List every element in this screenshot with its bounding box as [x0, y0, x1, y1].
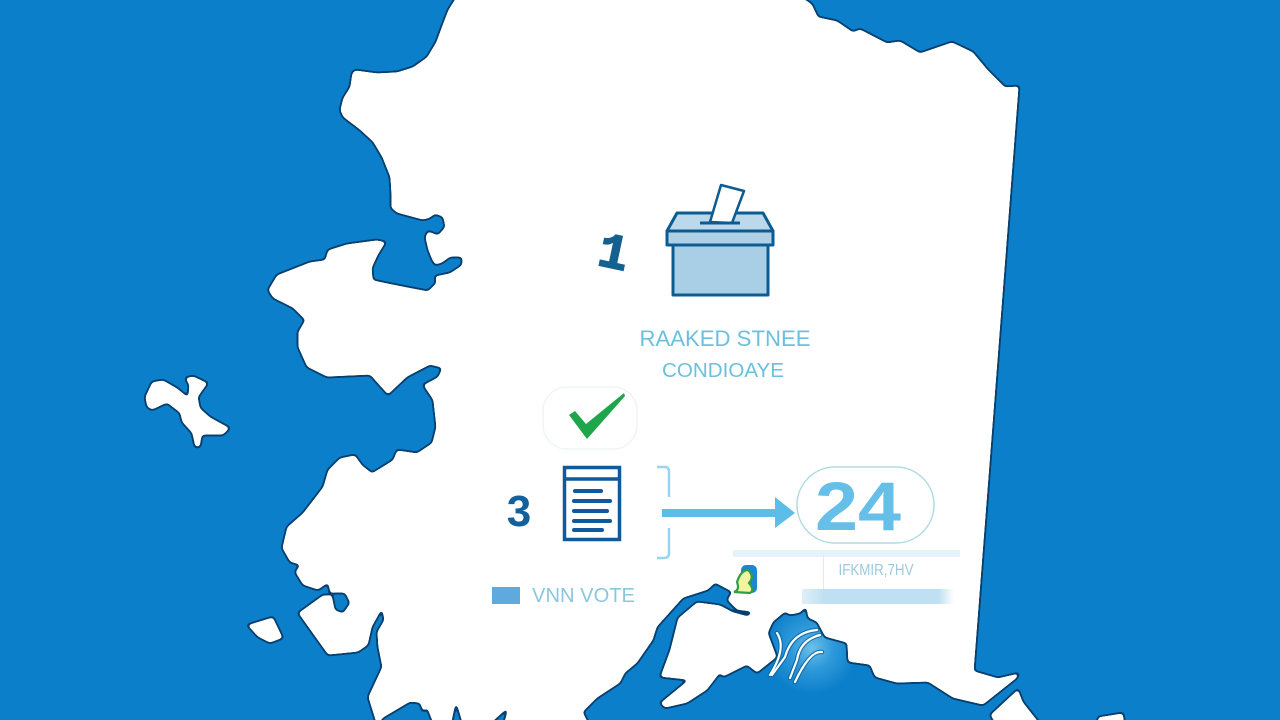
bracket [657, 467, 669, 558]
step number 3: 3 [507, 487, 531, 536]
card outline [543, 387, 637, 449]
arrow shaft [662, 509, 778, 517]
Nunivak Island [247, 617, 283, 643]
header rule [564, 477, 620, 481]
lake marker [734, 565, 757, 593]
ballot paper [710, 185, 744, 223]
legend text: VNN VOTE [532, 585, 635, 607]
top band [733, 550, 960, 557]
ballot box lid [667, 213, 773, 231]
icon: ballot box [667, 185, 773, 295]
check card [543, 387, 637, 449]
text lines [574, 491, 610, 530]
lake water [741, 565, 757, 593]
number 24: 24 [815, 468, 901, 545]
ballot box body [673, 245, 768, 295]
glacier waves in the sound [770, 630, 822, 682]
pill outline [797, 467, 934, 543]
icon: green check [569, 393, 625, 439]
bottom band [802, 589, 954, 604]
St. Lawrence Island [145, 376, 230, 447]
mainland [268, 0, 1019, 720]
column rule [823, 555, 824, 601]
step number 1: 1 [592, 224, 634, 286]
ranked choice label [640, 326, 810, 382]
label line 2: CONDIOAYE [662, 360, 784, 382]
arrow head [775, 497, 795, 528]
arrow to 24 [662, 497, 795, 528]
page [564, 468, 620, 540]
result pill [797, 467, 934, 545]
wave shadow [770, 630, 822, 682]
lake shore [734, 570, 752, 593]
map of Alaska [145, 0, 1125, 720]
label line 1: RAAKED STNEE [640, 326, 810, 351]
icon: document [564, 468, 620, 540]
southeast island [1097, 713, 1125, 720]
legend swatch [492, 587, 520, 604]
ballot box lid front [667, 231, 773, 245]
table heading: IFKMIR,7HV [838, 562, 914, 579]
panhandle island [990, 689, 1042, 720]
slot [700, 222, 740, 224]
vote legend [492, 585, 635, 607]
sound glow [766, 602, 858, 694]
faded results table [733, 550, 960, 604]
wave streaks [770, 630, 822, 682]
